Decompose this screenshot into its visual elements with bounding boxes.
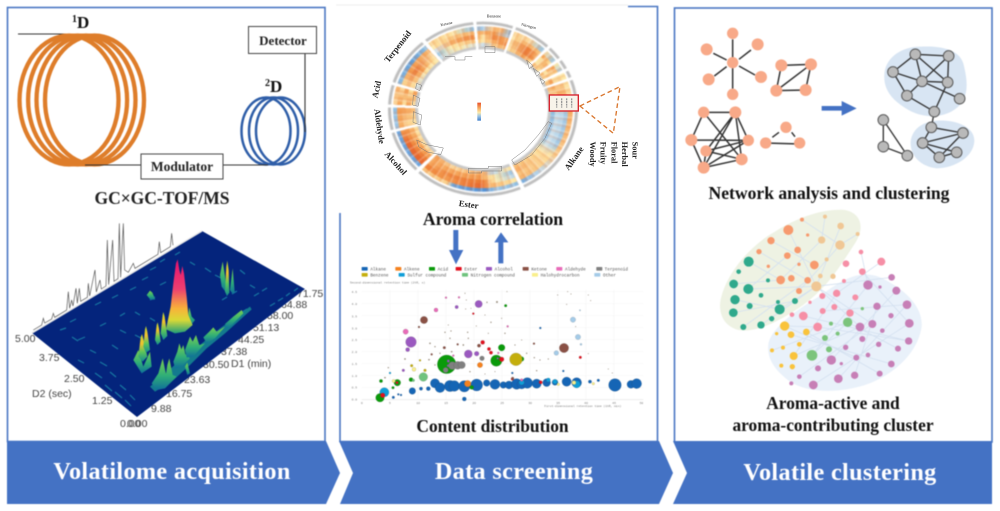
legend: Sulfur compound [407,273,447,278]
star network [701,28,767,100]
class labels: Alkane [562,144,586,172]
peaks [133,259,252,392]
green cluster area [720,210,861,331]
legend [362,267,628,278]
class labels: Acid [370,80,383,99]
axis labels behind surface: 64.88 [281,299,307,311]
side chromatogram trace [33,223,173,330]
axis labels behind surface: 71.75 [297,288,323,300]
heading: instrument: GC×GC-TOF/MS [94,188,230,208]
diagram: first dimension coil [18,34,144,164]
axis titles and ticks: 20 [472,402,476,405]
yellow side peaks [138,261,229,362]
aldehyde bubbles [403,296,523,381]
dense network [685,106,754,174]
edges [733,217,909,385]
panel: volatile clustering frame [674,8,992,442]
acid bubbles [376,304,524,402]
surface plane [32,231,305,417]
axis labels behind surface: D2 (sec) [32,388,72,400]
banner: volatile clustering: Volatile clustering [743,459,937,486]
axis labels behind surface: 51.13 [253,322,279,334]
aroma labels: Herbal [620,142,629,167]
panel: data screening frame [340,6,658,442]
axis titles and ticks: 1.5 [352,363,357,366]
cluster background: upper [884,47,967,116]
axis labels behind surface: 44.25 [238,334,264,346]
banner: volatilome acquisition [7,441,340,504]
axis titles and ticks: 2.5 [352,339,357,342]
inner white disc [418,49,548,169]
small scattered points [384,291,613,378]
alkene bubbles [464,362,483,387]
grid [362,290,643,400]
axis titles and ticks: 30 [528,402,532,405]
legend: Ester [464,267,478,272]
clustered network [878,49,968,163]
heat band 5 [410,43,554,175]
tan nodes [811,215,860,291]
heat band 2 [397,30,568,188]
label: first dimension: 1 [72,14,77,25]
axis titles and ticks: 3.0 [352,327,357,330]
label: first dimension: D [77,13,89,32]
axis titles and ticks: 3.5 [352,315,357,318]
axis labels behind surface: 3.75 [39,352,60,364]
aroma labels [588,142,639,167]
axis titles and ticks: First-dimensional retention time (1tR, min) [544,404,622,408]
axis titles and ticks: 0 [361,402,363,405]
orange nodes [756,218,819,294]
axis labels behind surface: 16.75 [166,388,192,400]
benzene bubbles [410,353,522,372]
axis titles and ticks: 2.0 [352,351,357,354]
nitrogen bubbles [412,373,428,382]
ketone bubbles [418,316,569,380]
axis labels behind surface: 2.50 [64,373,85,385]
triangle network [760,122,805,149]
axis labels behind surface: 58.00 [267,310,293,322]
class labels: Terpenoid [382,28,413,64]
legend: Alkane [370,267,386,272]
axis labels behind surface [15,288,323,430]
yellow nodes [770,321,810,369]
heat cell texture [392,26,572,192]
aroma labels: Woody [588,142,597,167]
axis labels behind surface: 1.25 [92,395,113,407]
axis labels behind surface: D1 (min) [231,358,271,370]
box: detector [248,26,316,54]
diagram: second dimension coil [242,98,305,164]
terpenoid bubbles [443,356,484,373]
label: second dimension: D [270,77,282,96]
pink nodes [790,250,885,331]
banner: data screening: Data screening [435,458,593,485]
heading: aroma-active cluster: Aroma-active and [766,393,900,413]
ester bubbles [380,313,582,398]
heat band 1 [392,26,572,192]
alcohol bubbles [402,300,499,372]
axis labels behind surface: 0.00 [127,418,148,430]
sulfur bubbles [380,372,580,397]
axis titles and ticks: 35 [556,402,560,405]
class labels: Ester [458,198,479,211]
axis titles and ticks: 40 [584,402,588,405]
tiny class labels [440,14,537,30]
other bubbles [554,310,582,355]
axis titles and ticks: 1.0 [352,375,357,378]
arrow: networks to clusters [822,101,857,116]
legend: Terpenoid [605,267,628,272]
axis titles and ticks: 4.5 [352,291,357,294]
axis titles and ticks: 45 [612,402,616,405]
tiny class labels: Ketone [440,20,453,27]
legend: Benzene [370,273,389,278]
box: detector: Detector [259,33,307,48]
dendrograms [413,47,552,173]
class labels: Aldehyde [372,108,387,144]
halohydrocarbon bubbles [392,367,595,386]
green nodes [807,307,864,361]
blue cluster area [768,275,922,391]
axis labels behind surface: 30.50 [203,359,229,371]
teal nodes [729,257,798,330]
legend: Other [603,273,616,278]
legend: Alkene [404,267,420,272]
white top edge [32,231,202,333]
inner grey sample band [414,46,550,172]
diagram: raw networks and clusters [685,28,974,174]
axis labels behind surface: 23.63 [184,374,210,386]
dashed callout triangle [580,87,620,133]
axis titles and ticks: 15 [444,402,448,405]
axis titles and ticks: 10 [416,402,420,405]
cluster background: lower [911,121,974,168]
arrows: correlation and distribution link [449,230,508,264]
heading: content distribution: Content distribution [416,416,569,436]
chart: aroma cluster network [720,210,922,391]
legend: Nitrogen compound [471,273,515,278]
label: second dimension: 2 [265,78,270,89]
diamond network [770,58,817,97]
legend: Aldehyde [565,267,586,272]
axis titles and ticks: 0.0 [352,399,357,402]
legend: Ketone [531,267,547,272]
ridge base [150,307,252,392]
chart: 3D chromatogram [15,223,323,430]
alkane bubbles [392,327,642,401]
colour scale legend [477,103,481,121]
class labels [370,28,586,211]
axis titles and ticks [350,281,643,408]
segment gaps [382,17,582,201]
aroma labels: Floral [609,142,618,164]
banner: data screening [339,441,673,504]
axis labels behind surface: 5.00 [15,333,36,345]
tallest peak [166,259,193,333]
white spacer [390,24,574,194]
chart: bubble scatter [350,267,643,408]
box: modulator [141,154,223,179]
heading: aroma-active cluster: aroma-contributing cluster [732,415,934,435]
highlighted aroma segment [549,95,578,111]
tiny class labels: Nitrogen [521,22,537,30]
axis titles and ticks: 5 [389,402,391,405]
axis labels behind surface: 9.88 [151,403,172,415]
ridge spikes [133,262,243,390]
box: modulator: Modulator [151,159,213,174]
axis titles and ticks: Second-dimensional retention time (2tR, s) [350,281,425,285]
tiny class labels: Benzene [487,14,501,19]
heat band 3 [402,34,564,184]
scattered small peaks [60,252,298,406]
axis labels behind surface: 0.00 [120,418,141,430]
outer grey sample labels [388,22,578,196]
legend: Acid [438,267,448,272]
heading: network analysis: Network analysis and clustering [709,183,950,203]
axis titles and ticks: 4.0 [352,303,357,306]
aroma labels: Sour [630,142,639,159]
heading: aroma-active cluster [732,393,934,435]
chart: circular heatmap ring [387,21,579,197]
axis titles and ticks: 0.5 [352,387,357,390]
class labels: Alcohol [383,149,409,177]
axis titles and ticks: 25 [500,402,504,405]
panel: volatilome frame [8,8,325,442]
banner: volatilome acquisition: Volatilome acquisition [53,458,291,485]
heat band 4 [406,39,559,179]
diagram: connecting lines [85,53,305,165]
legend: Alcohol [495,267,513,272]
purple nodes [789,274,914,389]
legend: Halohydrocarbon [541,273,580,278]
axis labels behind surface: 37.38 [221,346,247,358]
panel patch: faint top rule [336,4,628,6]
banner: volatile clustering [673,441,992,504]
aroma labels: Fruity [599,142,608,165]
heading: aroma correlation: Aroma correlation [423,209,563,229]
axis titles and ticks: 50 [640,402,643,405]
